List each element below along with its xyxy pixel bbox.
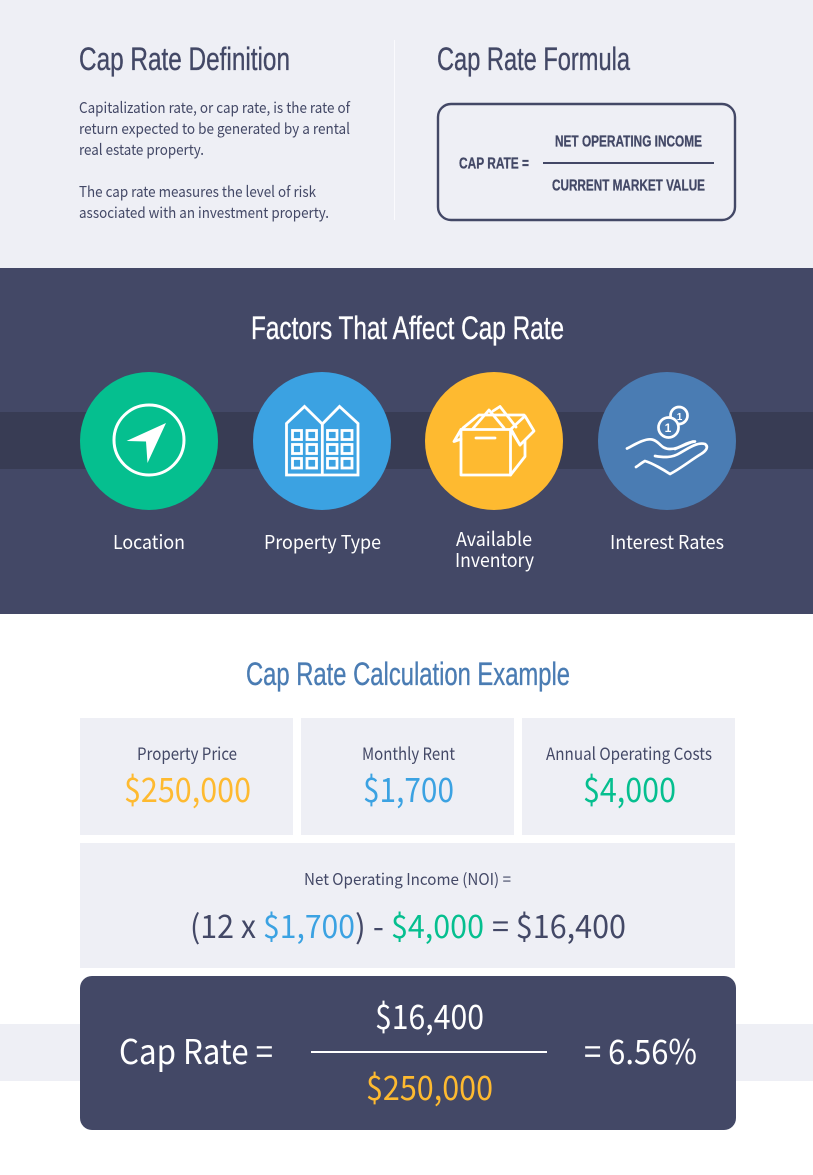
panel: cap rate result: = 6.56% <box>584 1025 697 1074</box>
panel: net operating income: Net Operating Income (NOI) = <box>304 866 511 890</box>
panel: cap rate result: Cap Rate = <box>119 1025 273 1074</box>
card: monthly rent <box>301 718 514 835</box>
panel: net operating income: $1,700 <box>263 902 355 948</box>
card: property price: Property Price <box>137 740 237 765</box>
panel: net operating income: ) - <box>355 902 384 948</box>
formula box: CAP RATE = <box>459 156 529 172</box>
card: monthly rent: $1,700 <box>363 763 454 812</box>
formula box: NET OPERATING INCOME <box>555 134 702 150</box>
panel: net operating income: $4,000 <box>391 902 484 948</box>
panel: definition and formula <box>0 0 813 268</box>
panel: net operating income: = $16,400 <box>492 902 626 948</box>
factor labels: Location <box>113 528 185 555</box>
card: property price <box>80 718 293 835</box>
card: monthly rent: Monthly Rent <box>362 740 456 765</box>
panel: factors <box>0 268 813 614</box>
factor labels: Interest Rates <box>610 528 724 555</box>
card: annual operating costs: Annual Operating Costs <box>546 740 712 765</box>
formula box: CURRENT MARKET VALUE <box>552 178 705 194</box>
card: property price: $250,000 <box>124 763 251 812</box>
heading: cap rate definition: Cap Rate Definition <box>79 41 290 77</box>
formula box <box>438 104 735 220</box>
text block: definition: return expected to be generated by a rental <box>79 118 350 139</box>
panel: cap rate result: $16,400 <box>375 990 484 1039</box>
heading: factors: Factors That Affect Cap Rate <box>251 310 564 346</box>
text block: definition: real estate property. <box>79 139 204 160</box>
factor labels <box>113 525 724 573</box>
factor labels: Property Type <box>264 528 381 555</box>
icon: available inventory <box>425 372 563 510</box>
icon: location <box>80 372 218 510</box>
icon: interest rates: 1 <box>677 412 683 423</box>
text block: definition: The cap rate measures the level of risk <box>79 181 317 202</box>
panel: net operating income: (12 x <box>190 902 256 948</box>
heading: cap rate formula: Cap Rate Formula <box>437 41 630 77</box>
icon: property type <box>253 372 391 510</box>
panel: cap rate result: $250,000 <box>366 1061 493 1110</box>
card: annual operating costs: $4,000 <box>583 763 676 812</box>
panel: net operating income <box>80 843 735 968</box>
text block: definition: associated with an investment property. <box>79 202 329 223</box>
text block: definition <box>79 97 351 223</box>
factor labels: Available <box>456 525 532 552</box>
card: annual operating costs <box>522 718 735 835</box>
decorative band <box>0 1024 813 1081</box>
panel: cap rate result <box>80 976 736 1130</box>
factor labels: Inventory <box>455 546 534 573</box>
icon: interest rates: 1 <box>665 421 672 435</box>
heading: calculation example: Cap Rate Calculation Example <box>246 656 570 692</box>
text block: definition: Capitalization rate, or cap rate, is the rate of <box>79 97 351 118</box>
icon: interest rates <box>598 372 736 510</box>
